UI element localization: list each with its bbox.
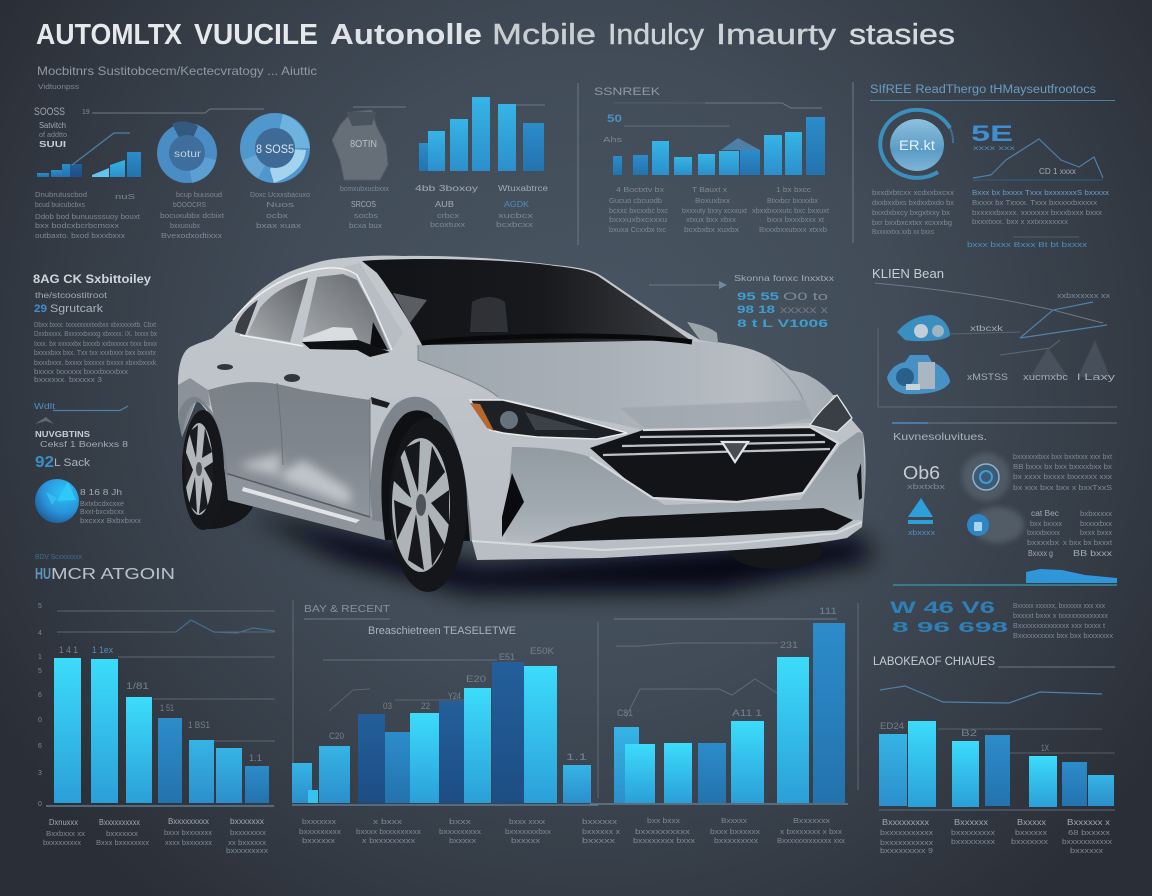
- panel: top left statistics: [34, 64, 549, 240]
- axis captions: bxxxxxxxxxxx: [880, 840, 934, 847]
- subheading: Kuvnesoluvitues.: [893, 431, 987, 443]
- axis captions: bxxxxxxx: [302, 819, 337, 826]
- captions: bcxxc bxcxxbc bxc: [609, 208, 669, 215]
- paragraph: bxxxx Ixxxxxx bxxxbxxxbxx: [34, 369, 129, 376]
- left headlight: [470, 400, 627, 439]
- bar chart: bottom right of centre: C81: [617, 708, 633, 718]
- bar chart: bottom middle: [292, 600, 621, 845]
- bar chart: bottom left: 0: [38, 801, 42, 808]
- chart heading: [304, 604, 516, 637]
- panel heading: SSNREEK: [594, 86, 661, 98]
- pie caption: Bxtxbcdxcxxe: [80, 501, 124, 508]
- title: [36, 19, 955, 51]
- stat captions: bcxbcxx: [496, 222, 534, 229]
- panel: left middle notes: [33, 274, 158, 525]
- diagram labels: xucmxbc: [1023, 372, 1069, 382]
- bar chart: bottom right: ED24: [880, 721, 904, 731]
- bar chart: bottom left: [38, 603, 275, 855]
- captions: Btxxbcr bxxxxbx: [767, 198, 818, 205]
- paragraph: bxxxxxxbxx bxx bxxtxxx xxx bxt: [1013, 454, 1112, 461]
- bar chart: bottom left: 1 4 1: [59, 645, 78, 655]
- car shadow: [250, 515, 875, 594]
- section heading: bottom left: BDV Scxxxxxxx: [35, 554, 82, 561]
- far front wheel: [729, 531, 823, 569]
- window corner shadow: [370, 322, 388, 350]
- bar chart: bottom middle: E51: [499, 652, 515, 662]
- title: Mcbile: [492, 19, 596, 51]
- axis captions: Bxxxxxxxxx: [168, 817, 209, 826]
- stat captions: bcoxtuxx: [430, 222, 466, 229]
- panel: left middle notes: the/stcoostitroot: [35, 291, 108, 300]
- pie caption: [80, 488, 142, 525]
- axis captions: Bxxxxxxxxxxxxx xxx: [777, 838, 846, 845]
- captions: 1 bx bxcc: [776, 187, 812, 194]
- car body silhouette: [178, 256, 866, 560]
- bar chart: bottom left: 1: [38, 654, 42, 661]
- stat captions: nuS: [115, 194, 136, 201]
- rear underbody: [205, 420, 253, 529]
- section heading: bottom left: HU: [35, 566, 51, 583]
- panel heading: SIfREE ReadThergo tHMayseutfrootocs: [870, 84, 1096, 96]
- bar chart: bottom left: 1 51: [160, 703, 174, 713]
- right mirror: [687, 322, 718, 343]
- stat text: L Sack: [54, 457, 91, 469]
- stat captions: outbaxto. bxod bxxxbxxx: [35, 233, 126, 240]
- captions: bcxbxbx xuxbx: [684, 227, 740, 234]
- callout: arrow and label beside car: 98 18: [737, 304, 775, 316]
- stat text: 92: [35, 454, 54, 471]
- axis captions: Bxxxxxx: [954, 818, 988, 827]
- icon: lock cloud: [967, 507, 1024, 543]
- bar chart: bottom left: 1/81: [126, 681, 149, 691]
- panel: top right statistics: [853, 82, 1115, 249]
- panel: top middle statistics: [578, 83, 829, 245]
- axis captions: Bxxxxxxxxxx: [99, 818, 140, 827]
- logo: [722, 442, 748, 462]
- heading: KLIEN Bean: [872, 267, 944, 281]
- diagram labels: l Laxy: [1077, 372, 1116, 382]
- bar chart: bottom left: 5: [38, 603, 42, 610]
- axis captions: bxxxxxxx: [106, 831, 139, 838]
- text columns: bxbxxxxx: [1080, 511, 1113, 518]
- quarter window: [235, 300, 258, 335]
- stat captions: Nuos: [266, 202, 295, 209]
- small line and bar chart: SOOSS: [34, 106, 65, 118]
- stat captions: Dnubrutuscbod: [35, 192, 87, 199]
- small line and bar chart: 19: [82, 109, 90, 116]
- car: [178, 256, 875, 594]
- stat captions: Ddob bod bunuusssuoy bouxt: [35, 214, 140, 221]
- figure: Sgrutcark: [50, 303, 104, 315]
- captions: 4 Boctxtv bx: [616, 187, 665, 194]
- axis captions: bxxxxxxxxx: [951, 830, 996, 837]
- captions: T Bauxt x: [692, 187, 728, 194]
- bar chart: bottom left: 3: [38, 770, 42, 777]
- axis captions: bxxx: [449, 819, 472, 826]
- axis captions: bxxxxxx: [302, 838, 336, 845]
- axis captions: [299, 819, 621, 845]
- bar chart: bottom left: 5: [38, 668, 42, 675]
- paragraph: bxxxxxx. bxxxxx 3: [34, 377, 102, 384]
- gauge circle: [880, 110, 953, 178]
- title: Autonolle: [330, 19, 482, 51]
- network diagram: xxbxxxxxx xx: [1057, 293, 1111, 300]
- gray blob icon: 8OTIN: [350, 139, 377, 150]
- stat line: Wdlt: [34, 402, 56, 411]
- bar chart: bottom middle: 1.1: [566, 752, 587, 762]
- text columns: Bxxxx g: [1028, 549, 1053, 558]
- stat captions: Doxc Ucxxsbacuxo: [250, 192, 310, 199]
- hood: [418, 339, 833, 430]
- axis captions: bxxxxxx: [1015, 830, 1048, 837]
- text columns: x bxx bx bxxxt: [1063, 540, 1112, 547]
- bar chart: bottom middle: E50K: [530, 646, 554, 656]
- axis captions: xxxx bxxxxxxx: [165, 840, 213, 847]
- bar chart: bottom right of centre: A11 1: [732, 708, 762, 718]
- diagram labels: xMSTSS: [967, 372, 1008, 382]
- section heading: bottom left: MCR ATGOIN: [51, 566, 175, 583]
- stat figure: Ob6: [903, 463, 940, 483]
- figure: [34, 303, 104, 315]
- axis captions: bxxxxxx: [1070, 848, 1104, 855]
- diagram labels: xtbcxk: [970, 324, 1004, 333]
- front bumper panel: [505, 432, 865, 543]
- left mirror: [302, 327, 390, 357]
- axis captions: x bxxxxxxx x bxx: [780, 829, 843, 836]
- stat captions: ocbx: [266, 213, 289, 220]
- axis captions: Bxxxxxxx: [793, 818, 831, 825]
- heading: 8AG CK Sxbittoiley: [33, 274, 152, 286]
- axis captions: Bxxbxxx xx: [46, 831, 86, 838]
- paragraph: Ixxx. bx xxxxxbx bxxxb xxbxxxxx txxx bxxx: [34, 341, 157, 348]
- big figure: 5E: [971, 121, 1013, 146]
- axis captions: Bxxx bxxxxxxxx: [96, 840, 150, 847]
- bar chart: bottom right: B2: [961, 728, 977, 738]
- body text: Bxxxx bx Txxxx. Txxx bxxxxxbxxxxx: [972, 200, 1098, 207]
- bar chart: bottom right: [879, 686, 1115, 855]
- captions: bxxx bxxxbxxx xt: [767, 217, 824, 224]
- body text: dxxbxxbxs bxdxxbxdo bx: [872, 200, 955, 207]
- front side window: [303, 274, 390, 350]
- donut chart 2: [240, 113, 310, 183]
- axis captions: Bxxxxxxxxx: [882, 818, 929, 827]
- axis captions: bxxxxxxx: [230, 817, 264, 826]
- bumper chrome: [472, 522, 862, 550]
- stat captions: SRCOS: [351, 200, 376, 209]
- bar chart: bottom middle: 03: [383, 701, 392, 711]
- captions: bxxxuty bxxy xcxxuxt: [682, 208, 747, 215]
- body text: bxr bxxbxcxtxx xcxxxbg: [872, 220, 952, 227]
- title: VUUCILE: [194, 19, 318, 51]
- body text: bxxdxbtcxx xcdxxbxcxx: [872, 190, 955, 197]
- bar chart: bottom left: 1 1ex: [92, 645, 113, 655]
- axis captions: Bxxxxxx x: [1067, 818, 1110, 827]
- paragraph: bx xxxx bxxxx bxxxxxx xxx: [1013, 474, 1113, 481]
- captions: Gucuo cbcuodb: [609, 198, 662, 205]
- axis captions: bxxxxxx x: [582, 829, 621, 836]
- paragraph: BB bxxx bx bxx bxxxxbxx bx: [1013, 464, 1113, 471]
- paragraph: [1013, 454, 1113, 492]
- bar chart: bottom right of centre: 111: [819, 606, 837, 616]
- stat captions: socbs: [354, 213, 379, 220]
- stat captions: bxxuoubx: [170, 223, 200, 230]
- captions: bxxxuxbxcxxxu: [609, 217, 667, 224]
- bar chart: bottom left: 0: [38, 717, 42, 724]
- stat text: [35, 430, 129, 471]
- text columns: [1027, 509, 1113, 558]
- window chrome: [233, 268, 392, 350]
- icon: boat: [908, 498, 936, 537]
- axis captions: bxxxxx: [582, 838, 616, 845]
- paragraph: [34, 322, 158, 384]
- diagram labels: [950, 324, 1116, 382]
- donut chart 1: sotur: [174, 149, 202, 160]
- axis captions: bxxx bxxxxxxx: [164, 830, 213, 837]
- section heading: bottom left: [35, 554, 175, 583]
- axis captions: [43, 817, 269, 855]
- area chart: [893, 569, 1117, 585]
- body text: bxxdxbxcy bxgxtxxy bx: [872, 210, 951, 217]
- title: AUTOMLTX: [36, 19, 183, 51]
- stat captions: [35, 184, 549, 240]
- paragraph: Bxxxxx xxxxxx, bxxxxxx xxx xxx: [1013, 603, 1105, 610]
- stat text: Ceksf 1 Boenkxs 8: [40, 440, 129, 449]
- stat captions: bocuxubbx dcbixt: [160, 213, 224, 220]
- bar chart: bottom right of centre: 231: [780, 640, 798, 650]
- door reflections: [242, 453, 350, 506]
- small line and bar chart: SUUI: [39, 140, 66, 149]
- stat captions: AUB: [435, 200, 454, 209]
- rear wheel: [178, 397, 228, 530]
- paragraph: Bxxxxxxxxxxxxxx xxx txxxx t: [1013, 623, 1105, 630]
- axis captions: bxxxxxxxxxx: [635, 829, 691, 836]
- axis captions: x bxxxxxxxxx: [362, 838, 416, 845]
- gray blob icon: [332, 107, 406, 180]
- callout: arrow and label beside car: xxxxx x: [780, 305, 828, 316]
- text columns: BB bxxx: [1073, 549, 1112, 558]
- title: Imaurty: [716, 19, 837, 51]
- captions: xbxxbxxxutc bxc bxxuxt: [752, 208, 829, 215]
- panel: top left statistics: Vidtuonpss: [38, 84, 80, 91]
- body text: [872, 190, 1110, 249]
- callout: arrow and label beside car: Skonna fonxc Inxxtxx: [734, 274, 834, 283]
- chart heading: labour charges: LABOKEAOF CHIAUES: [873, 654, 995, 668]
- body text: Bxxxxxtxx.xxb xx bxxs: [872, 229, 934, 236]
- stat captions: bcmxubxucbxxx: [340, 186, 389, 193]
- paragraph: Bxxxxxxxxxx bxx bxx bxxxxxxx: [1013, 633, 1114, 640]
- stat captions: Bvexodxodtixxx: [161, 233, 223, 240]
- pie chart: [35, 479, 79, 523]
- axis captions: bxxxx bxxxxxxxxx: [356, 829, 422, 836]
- stat captions: crbcx: [437, 213, 460, 220]
- line chart: CD 1 xxxx: [1039, 167, 1076, 176]
- blue glyph figures: [890, 598, 1008, 636]
- stat figure: xbxtxbx: [907, 484, 946, 491]
- big figure: [971, 121, 1015, 152]
- bar chart: bottom middle: E20: [466, 674, 486, 684]
- axis captions: bxxxxxxxxxxx: [880, 830, 934, 837]
- blue glyph figures: 8 96 698: [892, 619, 1008, 636]
- chart heading: BAY & RECENT: [304, 604, 390, 615]
- stat line: [34, 402, 128, 424]
- stat captions: bcxa bux: [349, 223, 383, 230]
- axis captions: [633, 818, 846, 845]
- axis captions: bxxxxxxxxx: [714, 838, 759, 845]
- chart heading: Breaschietreen TEASELETWE: [368, 625, 516, 637]
- figure: 29: [34, 303, 47, 315]
- paragraph: bxxxxbxx bxx. Txx txx xxxbxxx bxx bxxxtx: [34, 350, 156, 357]
- small line and bar chart: [34, 106, 264, 177]
- axis captions: bxxxxxxx: [1011, 839, 1049, 846]
- axis captions: bxxxxxxxx: [230, 830, 267, 837]
- network diagram: [875, 283, 1117, 407]
- small line and bar chart: Satvitch: [39, 121, 66, 130]
- captions: bxuxa Ccxxbx txc: [609, 227, 667, 234]
- stat captions: bcup buusoud: [176, 192, 222, 199]
- title: Indulcy: [608, 19, 705, 51]
- stat captions: bxax xuax: [256, 223, 302, 230]
- right headlight: [810, 395, 852, 432]
- captions: Boxuxbxx: [695, 198, 731, 205]
- bar chart: bottom middle: 22: [421, 701, 430, 711]
- text columns: bxx bxxxx: [1030, 521, 1063, 528]
- text columns: bxxxxbx: [1027, 540, 1060, 547]
- callout: arrow and label beside car: 8 t L V1006: [737, 318, 828, 330]
- callout: arrow and label beside car: 95 55: [737, 291, 779, 303]
- stat text: NUVGBTINS: [35, 430, 91, 439]
- axis captions: bxxxxxxxxx: [439, 829, 482, 836]
- axis captions: bxxxxxxxx bxxx: [633, 838, 696, 845]
- axis captions: bxxxxxxxbxx: [505, 829, 552, 836]
- body text: Bxxx bx bxxxx Txxx bxxxxxxxS bxxxxx: [972, 190, 1110, 197]
- pie caption: bxcxxx Bxbxbxxx: [80, 518, 142, 525]
- axis captions: Bxxxxx: [721, 818, 748, 825]
- axis captions: bxxxxxxxxx 9: [880, 848, 933, 855]
- lower door panels: [208, 382, 370, 517]
- bar chart: bottom right of centre: [590, 603, 858, 845]
- blue numeric: 50: [607, 113, 622, 125]
- stat captions: bOOOCRS: [173, 202, 206, 209]
- body text: bxxx bxxx Bxxx Bt bt bxxxx: [967, 242, 1088, 249]
- axis captions: bxxxxx: [449, 838, 477, 845]
- paragraph: bxxxxt bxxx x txxxxxxxxxxxxx: [1013, 613, 1109, 620]
- stat captions: bcud buicubcbxs: [35, 202, 85, 209]
- stat captions: Wtuxabtrce: [498, 184, 549, 193]
- icon: blue car 2: [887, 355, 950, 394]
- stat captions: bxx bodcxbcrbcmoxx: [35, 223, 120, 230]
- bar chart: bottom middle: Y24: [448, 691, 461, 701]
- axis captions: bxxx xxxx: [509, 819, 546, 826]
- right intake: [857, 463, 862, 500]
- axis captions: xx bxxxxxx: [228, 840, 267, 847]
- stat captions: xucbcx: [498, 213, 534, 220]
- windshield: [362, 259, 692, 345]
- title: stasies: [849, 19, 955, 51]
- icon: boat: xbxxxx: [908, 530, 936, 537]
- bar chart: bottom left: 6: [38, 692, 42, 699]
- stat captions: 4bb 3boxoy: [415, 184, 478, 193]
- donut chart 2: 8 SOS5: [256, 142, 294, 156]
- rear end panel: [178, 378, 210, 437]
- icon: gear cloud: [962, 453, 1010, 501]
- text columns: bxxx bxxx: [1080, 530, 1113, 537]
- axis captions: bxx bxxx: [647, 818, 681, 825]
- pie caption: Bxxt-bxcxbcxx: [80, 509, 124, 516]
- callout: arrow and label beside car: O0 to: [783, 291, 828, 303]
- panel: right middle diagram: [872, 267, 1117, 640]
- lower intake: [530, 508, 853, 543]
- captions: Bxxxbxxutxxx xtxxb: [759, 227, 827, 234]
- axis captions: Bxxxxx: [1017, 818, 1046, 827]
- text columns: bxxxxbxx: [1080, 521, 1113, 528]
- paragraph: [1013, 603, 1114, 640]
- stat figure: [903, 463, 946, 491]
- axis captions: bxxxxxxxxx: [299, 829, 342, 836]
- axis captions: Dxnuxxx: [49, 818, 78, 827]
- gauge circle: ER.kt: [899, 137, 935, 153]
- roof pillar: [343, 263, 403, 350]
- big figure: xxxx xxx: [973, 146, 1015, 152]
- bar chart: [613, 117, 825, 175]
- small line and bar chart: of addtto: [39, 132, 67, 139]
- paragraph: bxxxbxxx. bxxxx bxxxxx bxxxx xbxxbxxxk.: [34, 360, 158, 367]
- bar chart: bottom right: 1X: [1041, 743, 1049, 753]
- axis captions: bxxxxxxxxx: [43, 840, 82, 847]
- side intake: [502, 473, 524, 537]
- front wheel: [371, 397, 472, 592]
- sill: [225, 383, 385, 540]
- text columns: bxxxbxxxx: [1027, 530, 1060, 537]
- door handles and side marker: [217, 364, 390, 408]
- blue glyph figures: W 46 V6: [890, 598, 995, 617]
- paragraph: bx xxx bxx bxx x bxxTxxS: [1013, 485, 1112, 492]
- grille: [590, 427, 838, 502]
- axis captions: 68 bxxxxx: [1068, 830, 1111, 837]
- axis captions: bxxx bxxxxxx: [710, 829, 761, 836]
- rear side window: [247, 278, 308, 342]
- text columns: cat Bec: [1031, 509, 1059, 518]
- bar chart: bottom left: 6: [38, 743, 42, 750]
- axis captions: bxxxxxxxxx: [951, 839, 996, 846]
- paragraph: Dbxx bxxx: Ixxxxxxxxtxxbxx xbxxxxxxtb. Cbxt: [34, 322, 156, 329]
- callout: arrow and label beside car: [649, 274, 834, 330]
- body text: bxxxxxbxxxx. xxxxxxx bxxxbxxx bxxx: [972, 210, 1103, 217]
- donut chart 1: [157, 121, 217, 183]
- captions: xtxux bxx xbxx: [686, 217, 737, 224]
- bar chart top: [419, 97, 545, 171]
- axis captions: bxxxxxx: [582, 819, 618, 826]
- axis captions: x bxxx: [373, 819, 403, 826]
- body text: bxxxtxxx. bxx x xxtxxxxxxxx: [972, 219, 1069, 226]
- axis captions: bxxxxx: [511, 838, 541, 845]
- line chart: [973, 139, 1103, 180]
- bar chart: bottom left: 4: [38, 630, 42, 637]
- axis captions: bxxxxxxxxx: [226, 848, 269, 855]
- stat captions: AGDK: [504, 200, 530, 209]
- subheading: Mocbitnrs Sustitobcecm/Kectecvratogy ... Aiuttic: [37, 64, 317, 78]
- axis captions: bxxxxxxxxxxx: [1062, 839, 1113, 846]
- paragraph: Dxxbxxxx. Bxxxxxbxxxg xbxxxx. IX. Ixxxx bx: [34, 331, 157, 338]
- icon: blue car 1: [897, 315, 950, 341]
- panel: top middle statistics: Ahs: [603, 137, 623, 144]
- pie caption: 8 16 8 Jh: [80, 488, 122, 497]
- axis captions: [880, 818, 1113, 855]
- bar chart: bottom left: 1 BS1: [188, 720, 210, 730]
- captions: [609, 187, 829, 234]
- bar chart: bottom middle: C20: [329, 731, 344, 741]
- bar chart: bottom left: 1.1: [249, 753, 262, 763]
